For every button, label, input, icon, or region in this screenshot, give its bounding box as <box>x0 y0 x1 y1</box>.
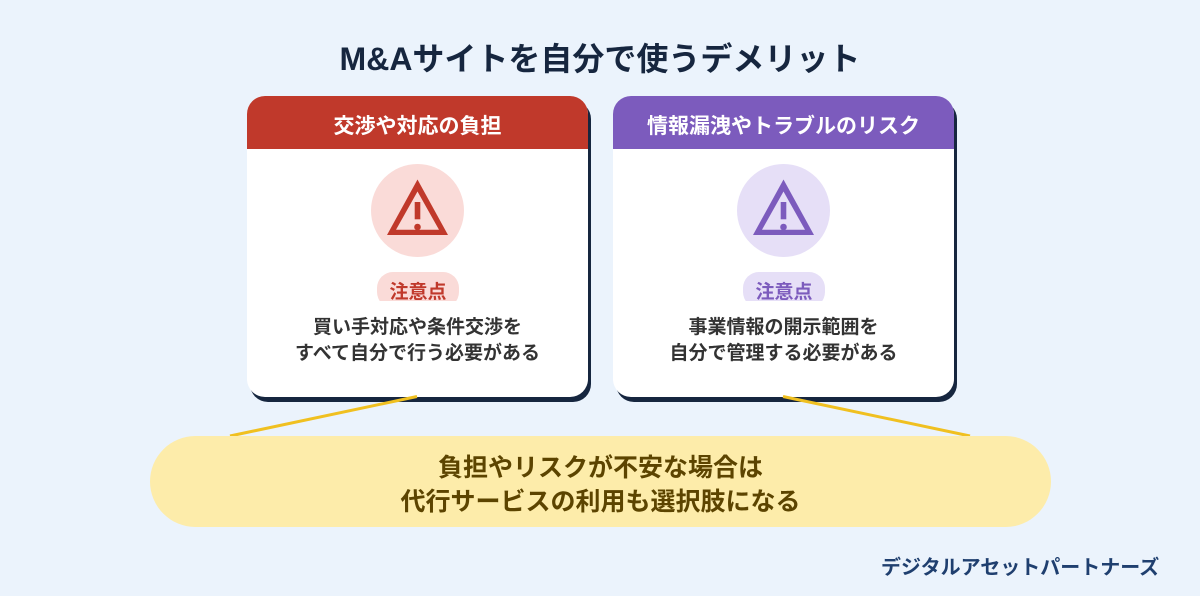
panel: negotiation burden <box>247 96 588 397</box>
text: information caution <box>669 316 898 364</box>
label: caution badge: 注意点 <box>755 282 812 303</box>
panel: information leak risk <box>613 96 954 397</box>
callout text: 負担やリスクが不安な場合は <box>438 454 763 482</box>
label: caution badge: 注意点 <box>389 282 446 303</box>
panel heading: information leak risk <box>613 96 954 149</box>
callout <box>150 436 1051 527</box>
footer brand name: デジタルアセットパートナーズ <box>881 557 1159 579</box>
text: negotiation caution <box>295 316 540 364</box>
label: caution badge <box>743 272 825 301</box>
title: M&Aサイトを自分で使うデメリット <box>340 41 860 77</box>
panel heading: information leak risk: 情報漏洩やトラブルのリスク <box>647 115 920 138</box>
panel heading: negotiation burden <box>247 96 588 149</box>
text: information caution: 事業情報の開示範囲を <box>688 317 878 338</box>
callout text <box>400 454 800 516</box>
callout text: 代行サービスの利用も選択肢になる <box>400 488 800 516</box>
text: information caution: 自分で管理する必要がある <box>669 343 898 364</box>
text: negotiation caution: すべて自分で行う必要がある <box>295 343 540 364</box>
icon: purple warning circle <box>737 164 830 257</box>
label: caution badge <box>377 272 459 301</box>
text: negotiation caution: 買い手対応や条件交渉を <box>313 317 522 338</box>
icon: red warning circle <box>371 164 464 257</box>
panel heading: negotiation burden: 交渉や対応の負担 <box>334 115 502 138</box>
